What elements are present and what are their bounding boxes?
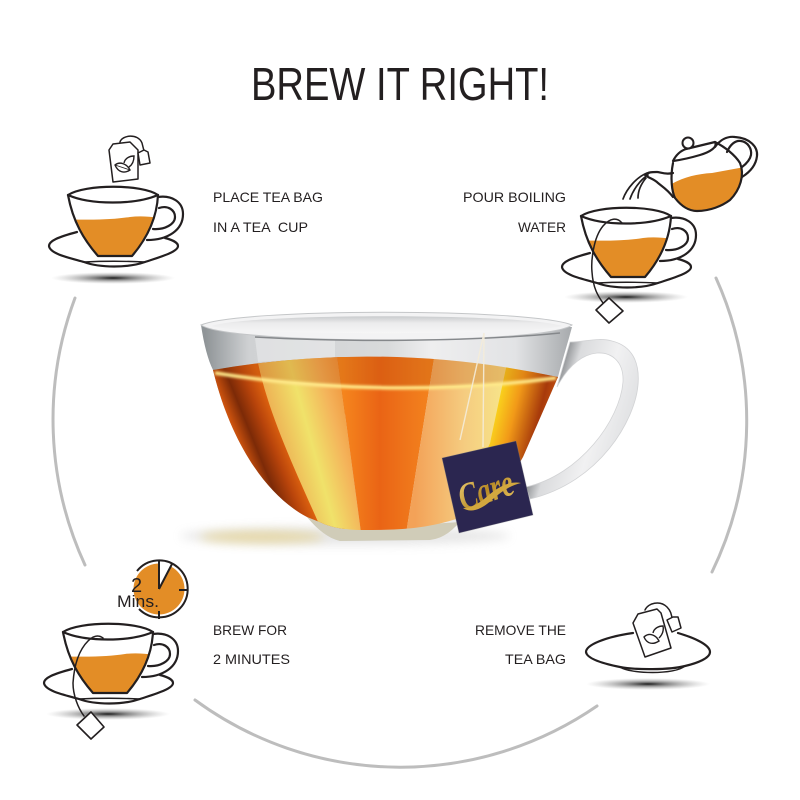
label: step 4: REMOVE THE: [475, 622, 566, 638]
tea liquid with light bands: [213, 356, 558, 530]
tea surface highlight: [215, 373, 556, 388]
icon: tea bag string and tag: [73, 636, 104, 739]
icon: 2 minute timer: [117, 560, 188, 619]
icon: tea bag: [109, 136, 150, 182]
title: BREW IT RIGHT!: [251, 58, 549, 110]
label: step 1: [213, 189, 323, 235]
label: step 3: 2 MINUTES: [213, 651, 290, 667]
glass bowl base: [307, 517, 460, 541]
cup ground shadow: [180, 527, 510, 545]
label: step 1: PLACE TEA BAG: [213, 189, 323, 205]
saucer shadow: [564, 291, 688, 303]
tea bag strings: [460, 333, 484, 447]
glass bowl: [201, 325, 572, 541]
step 2: pour boiling water: [463, 137, 757, 323]
label: step 3: BREW FOR: [213, 622, 287, 638]
central glass tea cup: [180, 312, 638, 545]
label: step 2: POUR BOILING: [463, 189, 566, 205]
step 4: remove the tea bag: [475, 603, 710, 690]
glass reflection band: [255, 338, 335, 362]
cycle arrows: grey circular arcs: [53, 278, 747, 767]
icon: tea cup with tea bag string: [562, 208, 696, 288]
icon: tea cup with tea bag string: [44, 624, 178, 704]
icon: 2 minute timer: Mins.: [117, 592, 159, 611]
step 3: brew for 2 minutes: [44, 560, 290, 739]
tea bag tag: Care: Care: [453, 462, 519, 519]
step 1: place tea bag: [49, 136, 323, 284]
cup handle: [526, 339, 638, 499]
icon: empty saucer: [586, 633, 710, 672]
label: step 3: [213, 622, 290, 667]
saucer shadow: [46, 708, 170, 720]
icon: tea cup with saucer: [49, 187, 183, 266]
icon: teapot pouring: [623, 137, 757, 215]
saucer shadow: [51, 272, 175, 284]
icon: tea bag: [633, 603, 681, 657]
cup rim: [201, 312, 572, 340]
tea bag tag: Care: [442, 441, 533, 533]
tea surface tint: [213, 356, 558, 386]
icon: tea bag string and tag: [592, 219, 623, 323]
label: step 2: WATER: [518, 219, 566, 235]
label: step 2: [463, 189, 566, 235]
label: step 4: [475, 622, 566, 667]
label: step 1: IN A TEA CUP: [213, 219, 308, 235]
saucer shadow: [586, 678, 710, 690]
label: step 4: TEA BAG: [505, 651, 566, 667]
icon: 2 minute timer: 2: [131, 575, 142, 597]
